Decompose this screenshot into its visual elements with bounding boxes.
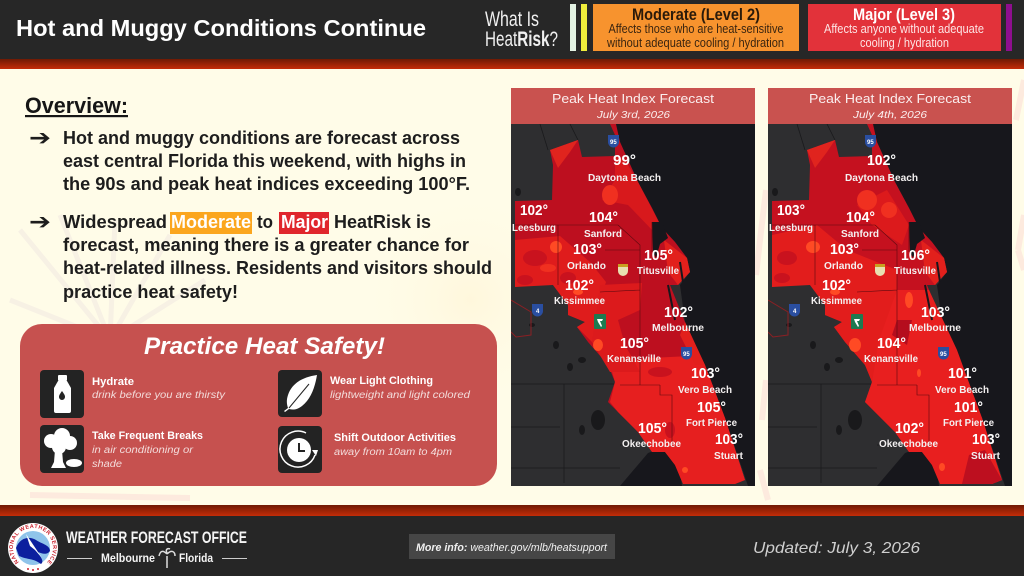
labels: july 4th cities: Titusville: [894, 265, 936, 277]
labels: july 3rd cities: Kissimmee: [554, 295, 605, 307]
labels: july 3rd cities: 102°: [565, 278, 594, 294]
more info link box: More info: weather.gov/mlb/heatsupport: [416, 542, 608, 554]
labels: july 4th cities: Daytona Beach: [845, 172, 918, 184]
labels: july 4th cities: 106°: [901, 248, 930, 264]
office name: WEATHER FORECAST OFFICE: [66, 528, 247, 547]
map title: Peak Heat Index Forecast: [552, 91, 714, 106]
heatrisk level bars: [570, 4, 1012, 51]
text block: heatrisk summary: Widespread: [63, 212, 167, 232]
icon: water bottle: [40, 370, 84, 418]
labels: july 4th cities: Kenansville: [864, 353, 918, 365]
text block: heatrisk summary: Moderate: [171, 212, 251, 232]
icons: july 4th highway signs: 95: [940, 352, 947, 358]
labels: july 4th cities: 102°: [822, 278, 851, 294]
text block: forecast summary: Hot and muggy conditions are forecast across: [63, 128, 460, 148]
office name: Florida: [179, 553, 214, 565]
heatrisk label: HeatRisk?: [485, 28, 558, 51]
panel: practice heat safety: [20, 324, 497, 486]
labels: july 4th cities: 101°: [954, 400, 983, 416]
labels: july 3rd cities: 105°: [638, 421, 667, 437]
item: hydrate: [92, 376, 226, 401]
panel: july 3rd map: [511, 88, 755, 486]
map title: [809, 91, 971, 121]
footer bar: [0, 505, 1024, 576]
labels: july 4th cities: 102°: [895, 421, 924, 437]
text block: forecast summary: east central Florida this weekend, with highs in: [63, 151, 466, 171]
labels: july 3rd cities: 99°: [613, 153, 636, 169]
map: july 3rd heat index: [511, 124, 755, 486]
major level box: Affects anyone without adequate: [824, 22, 984, 36]
labels: july 3rd cities: 105°: [697, 400, 726, 416]
office name: Melbourne: [101, 553, 155, 565]
moderate level box: without adequate cooling / hydration: [606, 36, 784, 50]
labels: july 3rd cities: Vero Beach: [678, 384, 732, 396]
labels: july 4th cities: 103°: [921, 305, 950, 321]
icons: july 3rd highway signs: 95: [683, 352, 690, 358]
heatrisk label: [485, 8, 558, 51]
icon: clock: [278, 426, 322, 473]
item: shift outdoor activities: [334, 432, 456, 458]
labels: july 3rd cities: Melbourne: [652, 322, 704, 334]
heading: practice heat safety: Practice Heat Safety!: [144, 333, 385, 360]
map: july 4th heat index: [768, 124, 1012, 486]
heading: overview: Overview:: [25, 93, 128, 118]
labels: july 3rd cities: [512, 153, 743, 462]
text block: heatrisk summary: ➔: [29, 210, 51, 235]
icons: july 3rd highway signs: [532, 135, 692, 360]
icons: july 4th highway signs: 4: [793, 309, 797, 315]
item: shift outdoor activities: away from 10am to 4pm: [334, 447, 452, 458]
map title: Peak Heat Index Forecast: [809, 91, 971, 106]
labels: july 3rd cities: Kenansville: [607, 353, 661, 365]
labels: july 4th cities: Leesburg: [769, 222, 813, 234]
item: take frequent breaks: Take Frequent Breaks: [92, 430, 203, 442]
map title: July 4th, 2026: [852, 109, 927, 121]
labels: july 3rd cities: Stuart: [714, 450, 743, 462]
labels: july 4th cities: 103°: [972, 432, 1000, 448]
icon: feather: [278, 370, 322, 417]
text block: heatrisk summary: forecast, meaning there is a greater chance for: [63, 235, 469, 255]
labels: july 4th cities: Vero Beach: [935, 384, 989, 396]
text block: heatrisk summary: HeatRisk is: [334, 212, 431, 232]
labels: july 3rd cities: 105°: [620, 336, 649, 352]
moderate level box: [593, 4, 799, 51]
text block: heatrisk summary: practice heat safety!: [63, 282, 238, 302]
map title: July 3rd, 2026: [596, 109, 670, 121]
labels: july 3rd cities: Titusville: [637, 265, 679, 277]
labels: july 4th cities: Fort Pierce: [943, 417, 994, 429]
text block: heatrisk summary: to: [257, 212, 273, 232]
text block: forecast summary: ➔: [29, 126, 51, 151]
labels: july 4th cities: 101°: [948, 366, 977, 382]
labels: july 4th cities: Orlando: [824, 260, 863, 272]
item: take frequent breaks: in air conditioning or: [92, 445, 194, 456]
heatrisk label: What Is: [485, 8, 539, 31]
labels: july 4th cities: [769, 153, 1000, 462]
text block: heatrisk summary: [29, 210, 492, 302]
moderate level box: Moderate (Level 2): [632, 5, 760, 24]
labels: july 4th cities: 103°: [830, 242, 859, 258]
text block: forecast summary: the 90s and peak heat indices exceeding 100°F.: [63, 174, 470, 194]
icons: july 4th highway signs: 95: [867, 140, 874, 146]
moderate level box: Affects those who are heat-sensitive: [608, 22, 784, 36]
text block: forecast summary: [29, 126, 470, 194]
icons: july 4th highway signs: [789, 135, 949, 360]
title: Hot and Muggy Conditions Continue: [16, 15, 426, 41]
major level box: [808, 4, 1001, 51]
item: wear light clothing: lightweight and light colored: [330, 390, 470, 401]
office name: [66, 528, 247, 568]
icon: shade tree: [40, 425, 84, 473]
labels: july 4th cities: Melbourne: [909, 322, 961, 334]
item: shift outdoor activities: Shift Outdoor Activities: [334, 432, 456, 444]
item: take frequent breaks: [92, 430, 203, 470]
item: hydrate: Hydrate: [92, 376, 134, 388]
labels: july 3rd cities: Fort Pierce: [686, 417, 737, 429]
labels: july 4th cities: 103°: [777, 203, 805, 219]
labels: july 3rd cities: 105°: [644, 248, 673, 264]
labels: july 3rd cities: Leesburg: [512, 222, 556, 234]
labels: july 4th cities: 104°: [846, 210, 875, 226]
labels: july 4th cities: Sanford: [841, 228, 879, 240]
labels: july 3rd cities: 103°: [715, 432, 743, 448]
labels: july 3rd cities: 102°: [520, 203, 548, 219]
labels: july 3rd cities: Okeechobee: [622, 438, 681, 450]
text block: heatrisk summary: heat-related illness. Residents and visitors should: [63, 258, 492, 278]
labels: july 3rd cities: Sanford: [584, 228, 622, 240]
item: wear light clothing: [330, 375, 470, 401]
icon: nws logo: NATIONAL WEATHER SERVICE: [9, 524, 57, 565]
map title: [552, 91, 714, 121]
item: hydrate: drink before you are thirsty: [92, 390, 226, 401]
labels: july 3rd cities: Orlando: [567, 260, 606, 272]
labels: july 4th cities: 102°: [867, 153, 896, 169]
icons: july 3rd highway signs: 4: [536, 309, 540, 315]
labels: july 4th cities: Stuart: [971, 450, 1000, 462]
icons: july 3rd highway signs: 95: [610, 140, 617, 146]
labels: july 3rd cities: 104°: [589, 210, 618, 226]
major level box: Major (Level 3): [853, 5, 955, 24]
labels: july 4th cities: Kissimmee: [811, 295, 862, 307]
item: take frequent breaks: shade: [92, 459, 122, 470]
major level box: cooling / hydration: [860, 36, 949, 50]
labels: july 3rd cities: Daytona Beach: [588, 172, 661, 184]
labels: july 3rd cities: 103°: [573, 242, 602, 258]
panel: july 4th map: [768, 88, 1012, 486]
header bar: [0, 0, 1024, 69]
more info link box: [409, 534, 615, 559]
updated date: Updated: July 3, 2026: [753, 540, 920, 557]
item: wear light clothing: Wear Light Clothing: [330, 375, 433, 387]
labels: july 4th cities: 104°: [877, 336, 906, 352]
labels: july 4th cities: Okeechobee: [879, 438, 938, 450]
labels: july 3rd cities: 103°: [691, 366, 720, 382]
labels: july 3rd cities: 102°: [664, 305, 693, 321]
text block: heatrisk summary: Major: [281, 212, 328, 232]
